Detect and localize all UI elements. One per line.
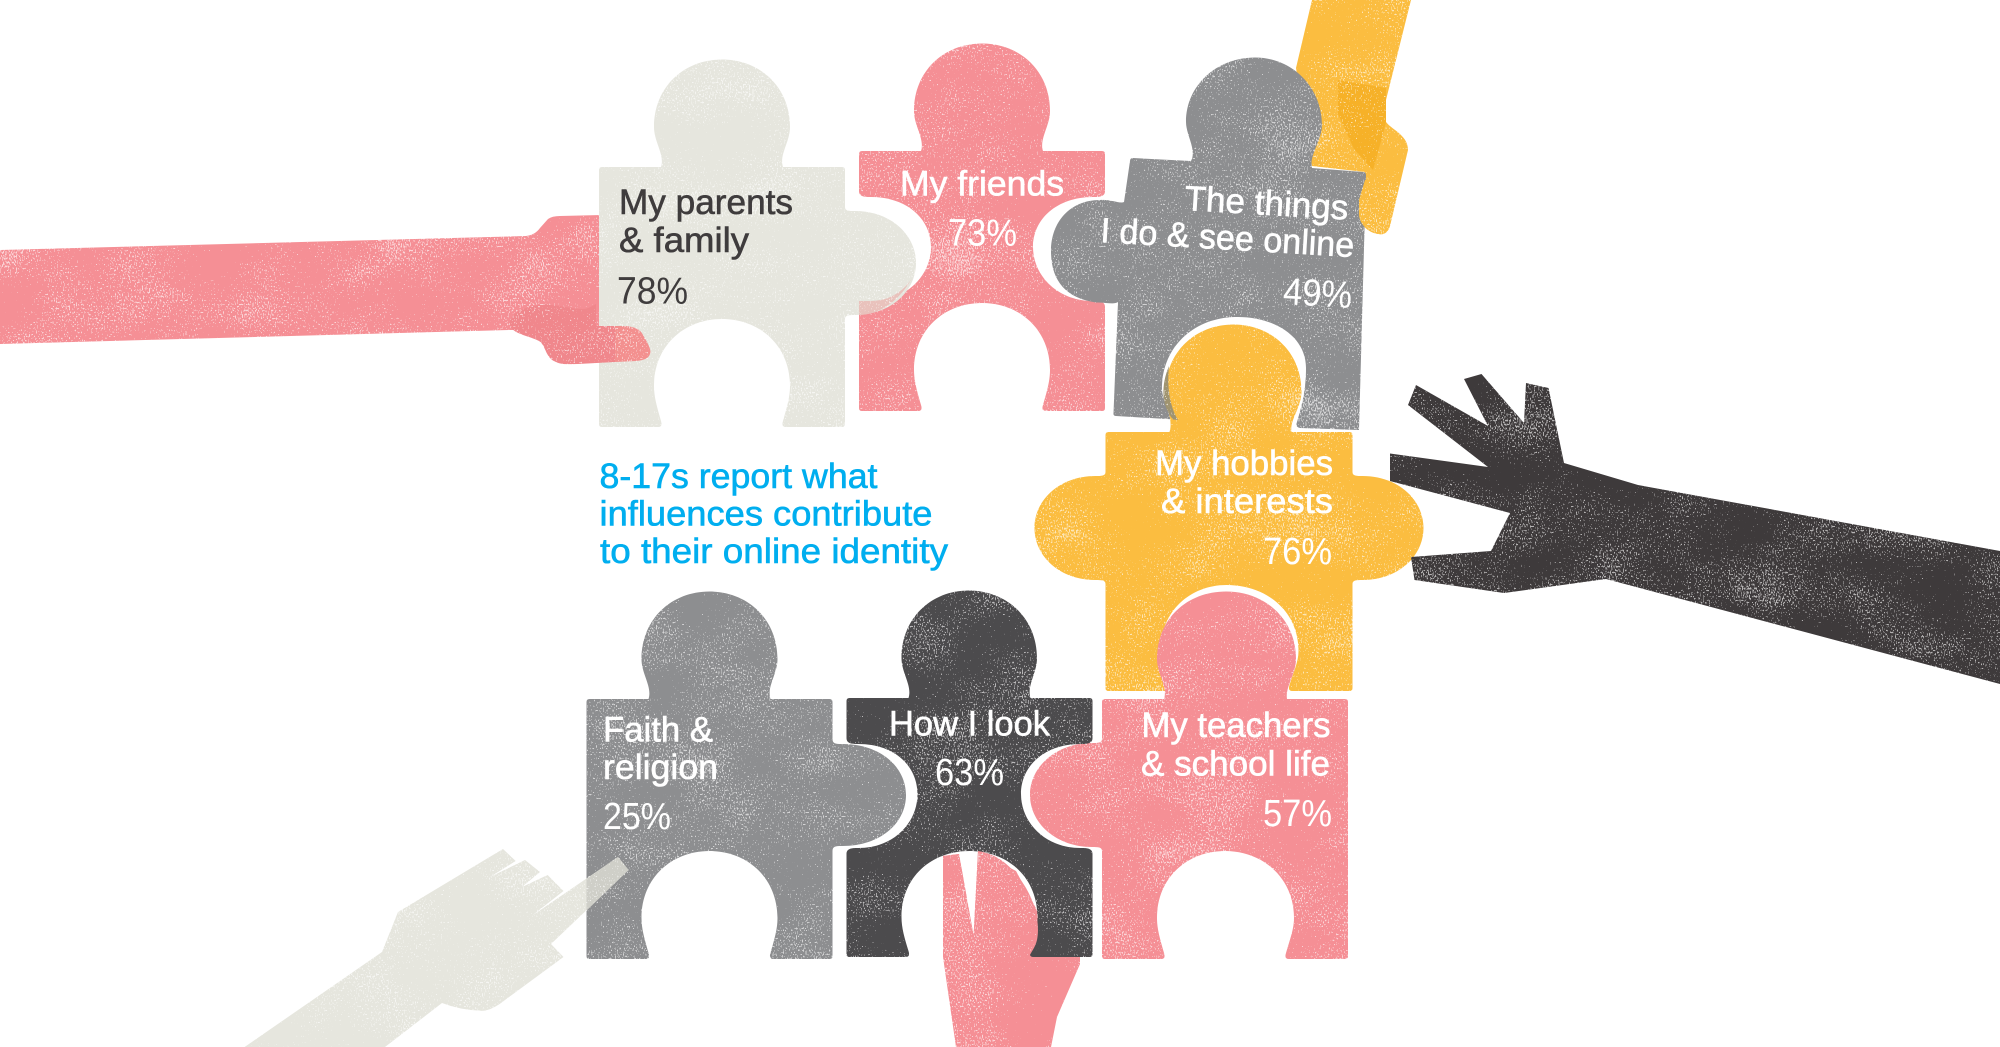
- label: the things I do and see online 49%: 49%: [1282, 271, 1353, 317]
- label: my parents and family 78%: My parents: [619, 183, 793, 222]
- hand: pale pointing hand from bottom left: [245, 849, 629, 1047]
- label: my hobbies and interests 76%: 76%: [1263, 531, 1332, 573]
- label: my hobbies and interests 76%: [1155, 444, 1333, 573]
- label: faith and religion 25%: Faith &: [603, 710, 713, 750]
- piece: the things I do and see online: [1051, 58, 1366, 430]
- label: my teachers and school life 57%: [1141, 706, 1332, 835]
- label: my friends 73%: 73%: [948, 212, 1017, 254]
- label: my friends 73%: My friends: [900, 164, 1064, 204]
- label: my teachers and school life 57%: 57%: [1263, 793, 1332, 835]
- label: how I look 63%: [889, 704, 1050, 794]
- title: blue intro text: to their online identity: [600, 532, 949, 571]
- title: blue intro text: [600, 457, 949, 571]
- piece: how I look: [846, 590, 1092, 957]
- title: blue intro text: 8-17s report what: [600, 457, 878, 496]
- label: my hobbies and interests 76%: & interests: [1161, 482, 1333, 521]
- label: the things I do and see online 49%: The things: [1184, 179, 1350, 228]
- label: faith and religion 25%: [603, 710, 718, 838]
- overlap: parents knob over friends: [859, 278, 912, 315]
- label: my parents and family 78%: 78%: [617, 270, 688, 312]
- overlap: grey edge under hobbies knob: [1163, 366, 1178, 420]
- label: my hobbies and interests 76%: My hobbies: [1155, 444, 1333, 483]
- piece: my parents and family: [599, 60, 916, 427]
- hand: pink fingers over how I look piece: [943, 851, 1038, 957]
- label: how I look 63%: 63%: [935, 752, 1004, 794]
- piece: my teachers and school life: [1030, 592, 1348, 959]
- label: my friends 73%: [900, 164, 1064, 254]
- hand: pink fingers over parents piece: [510, 304, 650, 364]
- label: my teachers and school life 57%: My teachers: [1142, 706, 1330, 745]
- label: faith and religion 25%: 25%: [603, 796, 671, 838]
- hand: yellow arm from top: [1296, 0, 1411, 234]
- piece: faith and religion: [586, 592, 906, 959]
- hand: yellow thumb shading: [1338, 80, 1386, 170]
- label: how I look 63%: How I look: [889, 704, 1050, 744]
- label: my teachers and school life 57%: & school life: [1141, 744, 1330, 784]
- hand: pink arm from left: [0, 215, 602, 344]
- piece: my hobbies and interests: [1034, 324, 1424, 691]
- piece: my friends: [859, 44, 1105, 411]
- label: my parents and family 78%: [617, 183, 793, 312]
- hand: yellow finger over things piece: [1359, 180, 1378, 234]
- label: my parents and family 78%: & family: [619, 221, 750, 260]
- title: blue intro text: influences contribute: [600, 494, 932, 534]
- label: the things I do and see online 49%: [1100, 179, 1355, 317]
- hand: dark reaching hand from right: [1390, 374, 2000, 684]
- label: faith and religion 25%: religion: [603, 748, 718, 787]
- hand: pink arm from bottom (behind piece): [943, 851, 1080, 1047]
- label: the things I do and see online 49%: I do & see online: [1100, 211, 1355, 265]
